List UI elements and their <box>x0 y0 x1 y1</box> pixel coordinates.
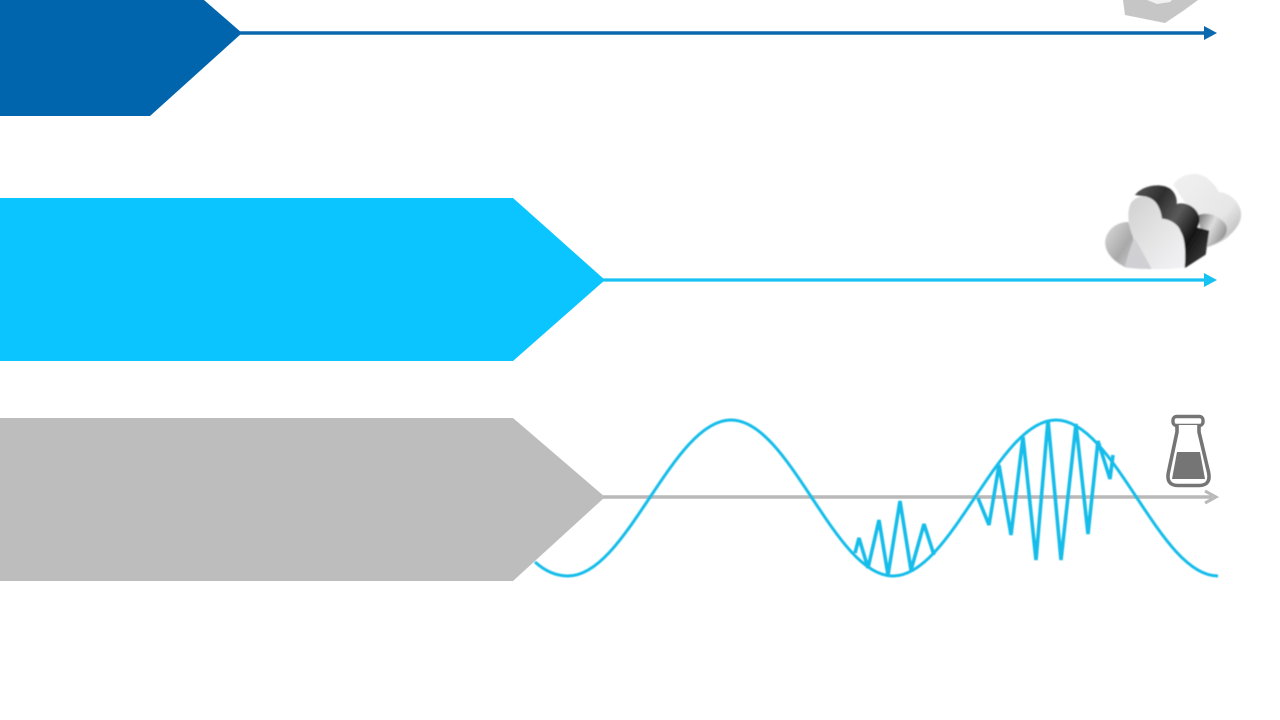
icon: clouds <box>1105 174 1241 269</box>
icon: grey box <box>1123 0 1198 23</box>
dark blue timeline arrow <box>240 26 1217 40</box>
cyan pentagon <box>0 198 605 361</box>
wave: cyan sine curve with spike bursts <box>535 420 1218 576</box>
grey timeline arrow <box>603 491 1216 503</box>
icon: flask <box>1168 416 1209 486</box>
cyan timeline arrow <box>603 273 1217 287</box>
grey pentagon <box>0 418 605 581</box>
panel: cyan arrow band <box>0 174 1241 361</box>
first spike burst <box>855 501 934 575</box>
panel: dark blue arrow band <box>0 0 1217 116</box>
sine wave line <box>535 420 1218 576</box>
dark blue pentagon <box>0 0 242 116</box>
second spike burst <box>978 420 1113 560</box>
panel: grey arrow band <box>0 416 1218 581</box>
